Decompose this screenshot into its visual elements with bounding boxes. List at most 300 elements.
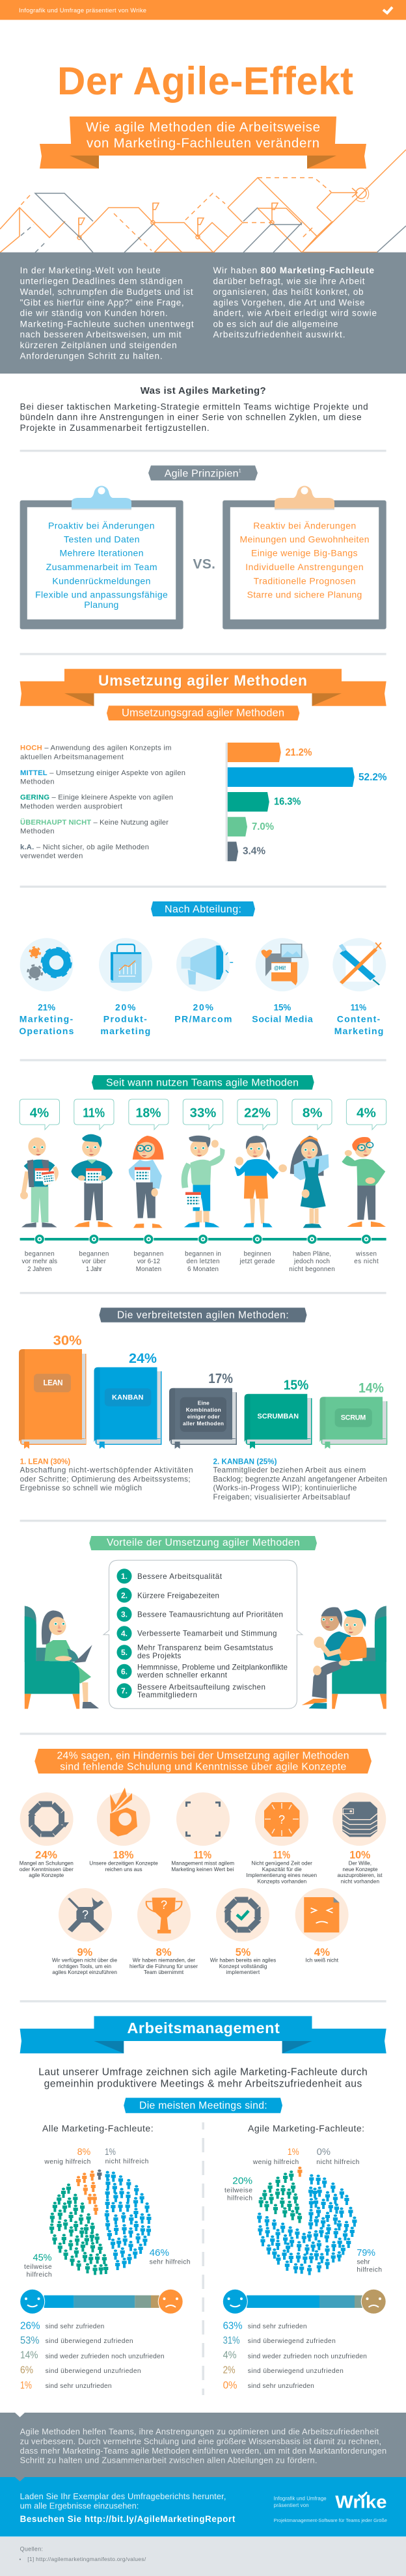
heading: what is agile marketing: Was ist Agiles Marketing? <box>141 385 266 396</box>
obstacle: no tools: agiles Konzept einzuführen <box>52 1969 117 1975</box>
people illustrations <box>20 1134 386 1228</box>
legend: slightly helpful <box>44 2147 91 2165</box>
obstacle: no tools: 9% <box>77 1946 92 1958</box>
legend: not helpful: 1% <box>105 2147 116 2158</box>
timeline captions: 2 Jahren <box>27 1266 52 1273</box>
benefits speech box: werden schneller erkannt <box>137 1671 228 1680</box>
kanban description: Backlog; begrenzte Anzahl angefangener Arbeiten <box>213 1475 387 1483</box>
intro panel: darüber befragt, wie sie ihre Arbeit <box>213 277 365 286</box>
lean description: Ergebnisse so schnell wie möglich <box>20 1484 142 1492</box>
obstacle: no time: Konzepts vorhanden <box>258 1878 307 1884</box>
obstacle: management sees no value: Management misst agilem <box>171 1861 234 1867</box>
obstacle: no leadership: ? <box>161 1898 167 1911</box>
person 7: man with glasses <box>342 1137 386 1227</box>
legend: very helpful: sehr <box>357 2258 370 2266</box>
satisfaction stats: all marketers: 1% <box>20 2380 32 2391</box>
timeline <box>20 1234 386 1244</box>
obstacle: no tools: ? <box>82 1908 88 1921</box>
bar: hoch: HOCH – Anwendung des agilen Konzepts im <box>20 745 171 752</box>
sources footer: [1] http://agilemarketingmanifesto.org/values/ <box>27 2556 146 2562</box>
department: marketing operations: Marketing- <box>20 1014 74 1024</box>
obstacle: lack of training: 24% <box>35 1849 57 1861</box>
network line illustration <box>0 150 406 253</box>
people pie: agile marketers <box>224 2147 382 2275</box>
timeline captions: 6 Monaten <box>187 1266 219 1273</box>
pill: agile principles: Agile Prinzipien <box>165 468 239 479</box>
book: lean: 30% <box>53 1334 82 1349</box>
header bar <box>0 0 406 20</box>
two men in armchair <box>302 1606 386 1709</box>
obstacle: no time: ? <box>278 1813 285 1826</box>
obstacle: no time: Implementierung eines neuen <box>246 1872 317 1878</box>
satisfaction stats: agile marketers: 2% <box>223 2365 236 2376</box>
book: combination: aller Methoden <box>183 1420 224 1427</box>
intro panel: die wir ständig von Kunden hören. <box>20 308 168 318</box>
sources footer <box>0 2536 406 2576</box>
banner: obstacles: 24% sagen, ein Hindernis bei der Umsetzung agiler Methoden <box>57 1750 349 1761</box>
timeline captions: vor 6-12 <box>137 1258 160 1265</box>
timeline captions: es nicht <box>354 1258 379 1265</box>
intro panel: Anforderungen Schritt zu halten. <box>20 351 163 361</box>
header bar: Infografik und Umfrage präsentiert von Wrike <box>19 7 146 14</box>
intro panel: Wir haben 800 Marketing-Fachleute <box>213 266 374 275</box>
obstacle: no time: Kapazität für die <box>262 1867 302 1872</box>
intro panel: Wandel, schrumpfen die Budgets und ist <box>20 287 193 297</box>
obstacle: lack of training: oder Kenntnissen über <box>20 1867 74 1872</box>
timeline captions: begannen <box>25 1250 55 1257</box>
legend: very helpful <box>150 2247 191 2266</box>
satisfaction stats: agile marketers: 0% <box>223 2380 237 2391</box>
sources footer: Quellen: <box>20 2545 43 2552</box>
benefits speech box: 4. <box>121 1629 128 1638</box>
timeline captions: jetzt gerade <box>239 1258 275 1265</box>
people: very helpful <box>257 2174 357 2275</box>
section ribbon: implementation <box>20 669 386 706</box>
bubble percentages: 22% <box>244 1106 271 1121</box>
subtitle ribbon <box>40 116 366 169</box>
book: kanban: KANBAN <box>112 1394 144 1402</box>
satisfaction stats: agile marketers: 31% <box>223 2335 240 2346</box>
timeline captions: 1 Jahr <box>86 1266 103 1273</box>
legend: partly helpful: hilfreich <box>227 2195 252 2202</box>
obstacle: no leadership: hierfür die Führung für unser <box>129 1964 198 1969</box>
book: combination: Eine <box>198 1399 210 1406</box>
bar: mittel: MITTEL – Umsetzung einiger Aspekte von agilen <box>20 769 185 777</box>
legend: slightly helpful: 1% <box>288 2147 299 2158</box>
department: social media: Social Media <box>252 1014 313 1024</box>
bar: k.A.: k.A. – Nicht sicher, ob agile Methoden <box>20 843 149 851</box>
bubble percentages: 11% <box>83 1106 105 1121</box>
clipboard: agile: Planung <box>84 599 118 610</box>
legend: not helpful: nicht hilfreich <box>105 2158 149 2165</box>
intro panel: In der Marketing-Welt von heute <box>20 266 161 275</box>
bar: überhaupt nicht: 7.0% <box>252 821 274 832</box>
obstacle: no will: neue Konzepte <box>342 1867 378 1872</box>
obstacle: no tools: Wir verfügen nicht über die <box>52 1958 117 1964</box>
obstacle: no will: 10% <box>349 1849 370 1861</box>
timeline captions: begannen <box>79 1250 109 1257</box>
sources footer: • <box>20 2556 21 2562</box>
intro panel: agiles Vorgehen, die Art und Weise <box>213 297 364 307</box>
pill: by department: Nach Abteilung: <box>165 904 241 915</box>
timeline captions: beginnen <box>244 1250 271 1257</box>
obstacle: no will: Der Wille, <box>349 1861 372 1867</box>
lean description <box>20 1457 193 1492</box>
department: content marketing <box>332 938 386 1036</box>
book: scrum: SCRUM <box>341 1414 366 1422</box>
bar: überhaupt nicht: Methoden <box>20 828 55 836</box>
legend: slightly helpful: wenig hilfreich <box>252 2159 299 2166</box>
obstacle: don't know <box>295 1888 349 1964</box>
clipboard: agile: Kundenrückmeldungen <box>52 575 150 586</box>
intro panel: kürzeren Zeitplänen und steigenden <box>20 340 177 350</box>
bar: mittel <box>20 767 387 787</box>
intro panel: "Gibt es hierfür eine App?" eine Frage, <box>20 297 184 307</box>
bar: mittel: 52.2% <box>359 772 387 783</box>
book: scrumban <box>245 1378 312 1449</box>
bar: hoch: aktuellen Arbeitsmanagement <box>20 754 124 761</box>
satisfaction stats: all marketers: sind sehr unzufrieden <box>46 2383 112 2390</box>
bar chart: implementation levels <box>20 743 387 861</box>
intro panel: nach besseren Arbeitsweisen, um mit <box>20 330 182 340</box>
satisfaction stats: agile marketers: sind sehr unzufrieden <box>248 2383 314 2390</box>
pill: degree of implementation: Umsetzungsgrad agiler Methoden <box>122 707 284 719</box>
timeline captions: Monaten <box>136 1266 161 1273</box>
frowny <box>158 2289 183 2314</box>
kanban description: Freigaben; visualisierter Arbeitsablauf <box>213 1493 351 1501</box>
legend: partly helpful <box>24 2252 52 2279</box>
legend: partly helpful <box>224 2176 252 2202</box>
section ribbon: implementation: Umsetzung agiler Methoden <box>99 672 308 689</box>
bubble percentages: 4% <box>30 1106 49 1121</box>
department: product marketing: marketing <box>100 1026 150 1036</box>
bubble percentages: 33% <box>190 1106 217 1121</box>
intro panel: ob es sich auf die allgemeine <box>213 319 338 329</box>
department: content marketing: 11% <box>351 1002 367 1012</box>
lean description: oder Schritte; Optimierung des Arbeitssystems; <box>20 1475 191 1483</box>
book chart <box>19 1334 387 1449</box>
benefits speech box: des Projekts <box>137 1652 182 1660</box>
definition paragraph <box>20 402 368 433</box>
obstacle: no tools <box>52 1888 117 1975</box>
kanban description: 2. KANBAN (25%) <box>213 1457 277 1466</box>
obstacle: no leadership: 8% <box>156 1946 172 1958</box>
person 3: woman with red hair <box>129 1136 164 1228</box>
call to action panel <box>0 2477 406 2536</box>
satisfaction stats: all marketers <box>20 2320 165 2391</box>
book: combination: einiger oder <box>187 1413 220 1419</box>
obstacle: already implemented: implementiert <box>226 1969 260 1975</box>
obstacle: current concepts suffice: 18% <box>113 1849 134 1861</box>
legend: not helpful: 0% <box>317 2147 331 2158</box>
banner: obstacles: sind fehlende Schulung und Kenntnisse über agile Konzepte <box>60 1761 347 1772</box>
kanban description: Teammitglieder beziehen Arbeit aus einem <box>213 1466 366 1475</box>
people: very helpful <box>105 2171 151 2270</box>
legend: partly helpful: 20% <box>232 2176 252 2187</box>
satisfaction stats: agile marketers: sind überwiegend unzufrieden <box>248 2368 344 2375</box>
satisfaction bar: all marketers <box>20 2289 183 2314</box>
satisfaction stats: all marketers: sind sehr zufrieden <box>46 2323 104 2331</box>
department: social media <box>252 938 313 1024</box>
people: partly helpful <box>49 2184 108 2275</box>
obstacle: lack of training: Mangel an Schulungen <box>20 1861 74 1867</box>
lean description: 1. LEAN (30%) <box>20 1457 70 1466</box>
book: scrumban: 15% <box>284 1378 309 1393</box>
satisfaction stats: all marketers: 53% <box>20 2335 39 2346</box>
obstacle: already implemented: Wir haben bereits ein agiles <box>210 1958 276 1964</box>
satisfaction stats: all marketers: 6% <box>20 2365 33 2376</box>
pill: agile principles: 1 <box>239 469 241 473</box>
timeline captions: vor mehr als <box>22 1258 57 1265</box>
obstacle: no will <box>332 1792 386 1884</box>
department: marketing operations <box>19 938 74 1036</box>
department: PR <box>174 938 233 1024</box>
book: combination: Kombination <box>186 1406 221 1413</box>
clipboard: traditional <box>223 486 386 629</box>
heading: all marketers: Alle Marketing-Fachleute: <box>42 2123 154 2133</box>
satisfaction stats: all marketers: 14% <box>20 2350 38 2361</box>
pill: most common methods <box>99 1308 307 1322</box>
call to action panel: Projektmanagement-Software für Teams jeder Größe <box>274 2517 387 2523</box>
timeline captions: begannen <box>134 1250 163 1257</box>
survey statement <box>38 2066 368 2090</box>
obstacle: current concepts suffice: reichen uns aus <box>105 1867 142 1872</box>
satisfaction stats: all marketers: sind überwiegend unzufrieden <box>46 2368 141 2375</box>
person 4: man waving <box>184 1136 224 1227</box>
heading: agile marketers: Agile Marketing-Fachleute: <box>248 2123 364 2133</box>
obstacle: no time: Nicht genügend Zeit oder <box>251 1861 312 1867</box>
person 5: woman waving <box>234 1136 287 1227</box>
department: marketing operations: Operations <box>19 1026 74 1036</box>
person 2: blue haired man <box>71 1134 113 1227</box>
obstacle: don't know: Ich weiß nicht <box>306 1958 339 1964</box>
satisfaction stats: all marketers: 26% <box>20 2320 40 2331</box>
definition paragraph: Bei dieser taktischen Marketing-Strategie ermitteln Teams wichtige Projekte und <box>20 402 368 411</box>
legend: not helpful <box>105 2147 149 2165</box>
satisfaction stats: agile marketers: sind sehr zufrieden <box>248 2323 307 2331</box>
obstacle: no leadership <box>129 1888 198 1975</box>
satisfaction stats: all marketers: sind weder zufrieden noch unzufrieden <box>46 2353 165 2360</box>
survey statement: Laut unserer Umfrage zeichnen sich agile Marketing-Fachleute durch <box>38 2066 368 2077</box>
call to action panel: Besuchen Sie http://bit.ly/AgileMarketingReport <box>20 2514 236 2524</box>
obstacle: already implemented: Konzept vollständig <box>219 1964 267 1969</box>
clipboard: traditional: Individuelle Anstrengungen <box>245 562 364 572</box>
timeline captions: haben Pläne, <box>293 1250 331 1257</box>
smiley <box>20 2289 45 2314</box>
frowny <box>361 2289 386 2314</box>
people: slightly helpful <box>76 2171 98 2215</box>
legend: not helpful: nicht hilfreich <box>316 2159 360 2166</box>
bar: k.A.: 3.4% <box>243 846 265 857</box>
obstacle: no will: auszuprobieren, ist <box>337 1872 383 1878</box>
obstacle: management sees no value <box>171 1792 234 1872</box>
legend: slightly helpful <box>252 2147 299 2166</box>
legend: not helpful <box>316 2147 360 2166</box>
book: scrum: 14% <box>359 1380 384 1395</box>
bubble percentages: 8% <box>303 1106 323 1121</box>
pill: benefits: Vorteile der Umsetzung agiler Methoden <box>107 1537 300 1548</box>
satisfaction stats: all marketers: sind überwiegend zufrieden <box>46 2338 133 2345</box>
section ribbon: work management <box>20 2016 386 2053</box>
obstacle: no leadership: Team übernimmt <box>144 1969 184 1975</box>
benefits speech box: 5. <box>121 1648 128 1657</box>
benefits speech box: Verbesserte Teamarbeit und Stimmung <box>137 1630 277 1638</box>
clipboard: traditional: Einige wenige Big-Bangs <box>251 548 358 558</box>
obstacles grid <box>20 1788 386 1975</box>
satisfaction stats: agile marketers: 63% <box>223 2320 243 2331</box>
book: combination <box>169 1371 237 1449</box>
department: PR: 20% <box>193 1002 213 1012</box>
obstacle: management sees no value: 11% <box>194 1849 211 1861</box>
lean description: Abschaffung nicht-wertschöpfender Aktivitäten <box>20 1466 193 1475</box>
section ribbon: work management: Arbeitsmanagement <box>127 2020 280 2036</box>
kanban description: (Works-in-Progess WIP); kontinuierliche <box>213 1484 357 1492</box>
obstacle: lack of training <box>20 1792 74 1878</box>
department: product marketing: Produkt- <box>103 1014 147 1024</box>
clipboard: agile: Testen und Daten <box>64 534 140 544</box>
obstacle: no will: nicht vorhanden <box>341 1878 379 1884</box>
legend: partly helpful: teilweise <box>24 2264 52 2271</box>
pill: degree of implementation <box>107 706 299 720</box>
versus label: VS. <box>193 556 215 571</box>
benefits speech box: Kürzere Freigabezeiten <box>137 1591 219 1600</box>
benefits speech box: 6. <box>121 1667 128 1677</box>
book: kanban: 24% <box>129 1351 157 1366</box>
intro panel <box>0 253 406 374</box>
satisfaction bar: agile marketers <box>223 2289 386 2314</box>
satisfaction stats: agile marketers <box>223 2320 367 2391</box>
timeline captions: wissen <box>355 1250 377 1257</box>
bar: gering: Methoden werden ausprobiert <box>20 803 123 811</box>
legend: partly helpful: 45% <box>33 2252 52 2263</box>
obstacle: no leadership: Wir haben niemanden, der <box>133 1958 195 1964</box>
title: Der Agile-Effekt <box>57 59 353 103</box>
book: scrumban: SCRUMBAN <box>258 1412 299 1420</box>
legend: very helpful: sehr hilfreich <box>150 2259 191 2266</box>
benefits speech box: Teammitgliedern <box>137 1691 197 1699</box>
pill: agile principles <box>148 465 258 480</box>
benefits speech box: Bessere Teamausrichtung auf Prioritäten <box>137 1611 283 1619</box>
book: scrum <box>319 1380 387 1449</box>
legend: partly helpful: teilweise <box>224 2187 252 2195</box>
timeline captions: jedoch noch <box>293 1258 330 1265</box>
benefits speech box: Bessere Arbeitsaufteilung zwischen <box>137 1683 265 1692</box>
pill: meetings: Die meisten Meetings sind: <box>139 2100 267 2111</box>
person: not helpful <box>97 2169 102 2180</box>
department: PR: PR/Marcom <box>174 1014 232 1024</box>
person 6: woman with long hair <box>290 1136 329 1228</box>
clipboard: traditional: Starre und sichere Planung <box>247 590 362 600</box>
bar: gering: GERING – Einige kleinere Aspekte von agilen <box>20 794 173 802</box>
obstacle: current concepts suffice <box>89 1788 158 1872</box>
benefits speech box <box>103 1560 303 1708</box>
bubble percentages: 4% <box>357 1106 376 1121</box>
bar: k.A. <box>20 842 265 861</box>
pill: by department <box>151 901 255 916</box>
benefits speech box: 2. <box>121 1591 128 1600</box>
department: product marketing <box>99 938 152 1036</box>
call to action panel: Laden Sie Ihr Exemplar des Umfrageberichts herunter, <box>20 2491 226 2501</box>
bar: hoch: 21.2% <box>285 747 312 758</box>
benefits speech box: 7. <box>121 1686 128 1695</box>
speech bubbles <box>20 1099 386 1130</box>
benefits speech box: Bessere Arbeitsqualität <box>137 1572 223 1581</box>
satisfaction stats: agile marketers: 4% <box>223 2350 237 2361</box>
bar: mittel: Methoden <box>20 778 55 786</box>
intro panel: Marketing-Fachleute suchen unentwegt <box>20 319 194 329</box>
intro panel: Arbeitszufriedenheit auswirkt. <box>213 330 345 340</box>
clipboard: agile <box>20 486 183 629</box>
pill: most common methods: Die verbreitetsten agilen Methoden: <box>117 1310 289 1321</box>
department: marketing operations: 21% <box>38 1002 56 1012</box>
department: content marketing: Content- <box>337 1014 381 1024</box>
survey statement: gemeinhin produktivere Meetings & mehr Arbeitszufriedenheit aus <box>44 2079 362 2090</box>
timeline captions: den letzten <box>186 1258 220 1265</box>
smiley <box>223 2289 248 2314</box>
definition paragraph: bündeln dann ihre Anstrengungen in einer Serie von schnellen Zyklen, um diese <box>20 413 362 422</box>
people: partly helpful <box>259 2171 302 2223</box>
call to action panel: um alle Ergebnisse einzusehen: <box>20 2501 139 2510</box>
department: social media: 15% <box>274 1002 291 1012</box>
person: slightly helpful <box>297 2167 302 2177</box>
definition paragraph: Projekte in Zusammenarbeit fertigzustellen. <box>20 423 210 433</box>
departments row <box>19 938 386 1036</box>
conclusion panel: Agile Methoden helfen Teams, ihre Anstrengungen zu optimieren und die Arbeitszufriedenheit <box>20 2427 379 2437</box>
intro panel: unterliegen Deadlines dem ständigen <box>20 277 183 286</box>
person 1: bald man <box>20 1138 57 1227</box>
benefits speech box: Hemmnisse, Probleme und Zeitplankonflikte <box>137 1664 288 1672</box>
obstacle: no time <box>246 1792 317 1884</box>
bar: hoch <box>20 743 312 762</box>
department: social media: @Hi! <box>274 965 286 971</box>
legend: very helpful: hilfreich <box>357 2266 382 2273</box>
bubble percentages <box>30 1106 376 1121</box>
clipboard: traditional: Meinungen und Gewohnheiten <box>239 534 370 544</box>
people pie: all marketers <box>24 2147 191 2279</box>
timeline captions: vor über <box>82 1258 107 1265</box>
department: content marketing: Marketing <box>334 1026 383 1036</box>
bar: überhaupt nicht <box>20 817 274 836</box>
subtitle ribbon: von Marketing-Fachleuten verändern <box>87 136 319 151</box>
banner: obstacles <box>34 1749 372 1774</box>
timeline captions: nicht begonnen <box>289 1266 335 1273</box>
pill: since when <box>92 1075 314 1089</box>
conclusion panel <box>0 2413 406 2477</box>
conclusion panel: dass mehr Marketing-Teams agile Methoden einführen werden, um mit den Marktanforderungen <box>20 2446 386 2456</box>
satisfaction stats: agile marketers: sind weder zufrieden noch unzufrieden <box>248 2353 367 2360</box>
intro panel: ändert, wie Arbeit erledigt wird sowie <box>213 308 377 318</box>
legend: slightly helpful: 8% <box>77 2147 90 2158</box>
clipboard: agile: Mehrere Iterationen <box>60 548 143 558</box>
obstacle: lack of training: agile Konzepte <box>29 1872 64 1878</box>
section ribbon: implementation: Umsetzung agiler Methoden <box>98 672 307 689</box>
clipboard: agile: Proaktiv bei Änderungen <box>48 520 155 530</box>
obstacle: current concepts suffice: Unsere derzeitigen Konzepte <box>89 1861 158 1867</box>
obstacle: management sees no value: Marketing keinen Wert bei <box>171 1867 234 1872</box>
subtitle ribbon: Wie agile Methoden die Arbeitsweise <box>86 120 320 135</box>
obstacle: no time: 11% <box>273 1849 290 1861</box>
bubble percentages: 18% <box>135 1106 161 1121</box>
conclusion panel: Schritt zu halten und Zusammenarbeit zwischen allen Abteilungen zu fördern. <box>20 2456 317 2465</box>
clipboard: agile: Flexible und anpassungsfähige <box>35 590 168 600</box>
woman in armchair <box>25 1606 99 1709</box>
benefits speech box: 3. <box>121 1610 128 1619</box>
clipboard: traditional: Reaktiv bei Änderungen <box>253 520 356 530</box>
wrike logo: Wrike <box>335 2491 386 2512</box>
satisfaction stats: agile marketers: sind überwiegend zufrieden <box>248 2338 336 2345</box>
pill: since when: Seit wann nutzen Teams agile Methoden <box>106 1077 299 1088</box>
clipboard: agile: Zusammenarbeit im Team <box>46 562 157 572</box>
